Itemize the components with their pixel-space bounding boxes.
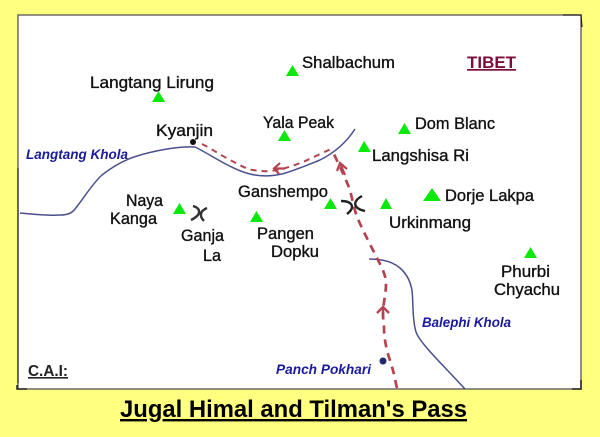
pass symbol: Tilman's Pass [341,196,365,214]
label: TIBET: TIBET [467,53,517,72]
place dot: Panch Pokhari [380,358,386,364]
label: Urkinmang: Urkinmang [389,214,471,232]
label: Pangen Dopku [257,225,319,261]
label: Phurbi Chyachu: Chyachu [494,281,560,299]
river: Balephi Khola [369,259,465,389]
arrow: north on route lower [377,307,389,318]
label: Pangen Dopku: Dopku [271,243,319,261]
label: Phurbi Chyachu: Phurbi [501,263,550,281]
label: Phurbi Chyachu [494,263,560,299]
label: Naya Kanga: Naya [126,192,164,210]
label: Dorje Lakpa: Dorje Lakpa [445,187,535,205]
label: Ganja La: Ganja [181,227,225,245]
arrow: north on route upper [337,163,347,175]
route: Kyanjin to pass junction [202,144,331,171]
route: Panch Pokhari to junction [333,152,397,388]
peaks [152,65,537,258]
pass symbol: Ganja La [191,206,207,221]
label: Naya Kanga [110,192,164,228]
label: Balephi Khola: Balephi Khola [422,314,511,330]
label: Shalbachum: Shalbachum [302,54,395,72]
label: Kyanjin: Kyanjin [156,122,213,140]
label: C.A.I:: C.A.I: [28,363,68,380]
label: Dom Blanc: Dom Blanc [415,115,495,133]
place dot: Kyanjin [190,139,196,145]
arrow: westward on route [274,163,285,174]
river: Langtang Khola [20,129,355,215]
label: Naya Kanga: Kanga [110,210,158,228]
label: Panch Pokhari: Panch Pokhari [276,361,372,377]
label: Langtang Lirung: Langtang Lirung [90,74,214,92]
label: Ganja La [181,227,225,265]
label: Pangen Dopku: Pangen [257,225,314,243]
label: Langshisa Ri: Langshisa Ri [372,147,469,165]
title: Jugal Himal and Tilman's Pass [120,396,467,423]
label: Ganshempo: Ganshempo [238,183,328,201]
label: Ganja La: La [203,247,222,265]
label: Yala Peak: Yala Peak [263,114,335,132]
label: Langtang Khola: Langtang Khola [26,146,128,162]
